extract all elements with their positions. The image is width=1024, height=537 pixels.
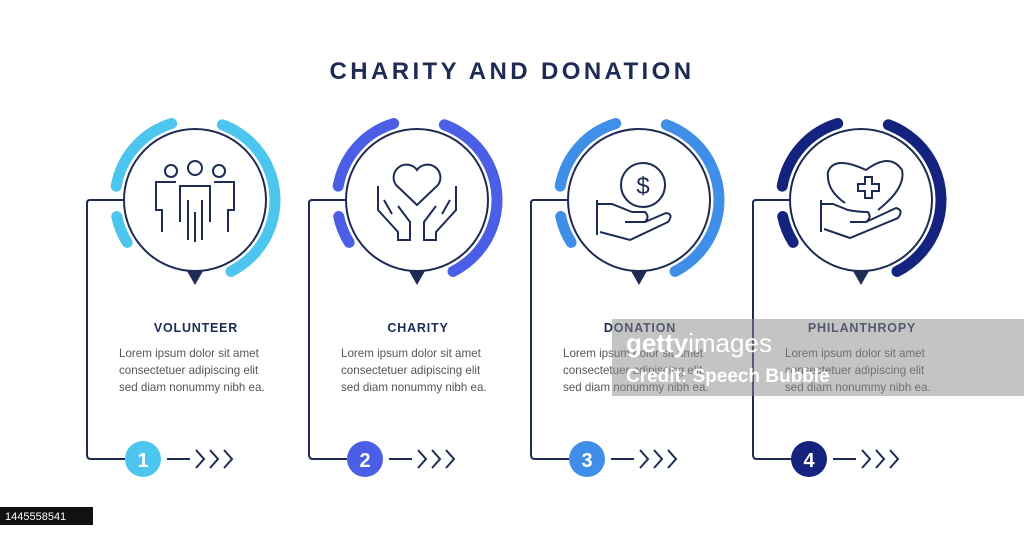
panel: donation: [529, 90, 749, 477]
panel: philanthropy: [751, 90, 971, 477]
heading: CHARITY: [387, 321, 449, 335]
icon circle: [124, 129, 266, 271]
arcs: [751, 90, 971, 310]
number badge 2: 2: [359, 450, 371, 472]
icon circle: [568, 129, 710, 271]
connector line: [753, 200, 791, 459]
connector line: [87, 200, 125, 459]
body text: consectetuer adipiscing elit: [563, 364, 703, 377]
body text: sed diam nonummy nibh ea.: [785, 381, 931, 394]
body text: Lorem ipsum dolor sit amet: [119, 347, 260, 360]
arcs: [85, 90, 305, 310]
body text: sed diam nonummy nibh ea.: [563, 381, 709, 394]
number badge 3: 3: [581, 450, 593, 472]
body text: consectetuer adipiscing elit: [119, 364, 259, 377]
image id label: [0, 507, 93, 525]
icon: hand coin: [597, 163, 671, 240]
icon: hand coin: $: [636, 173, 650, 200]
body text: consectetuer adipiscing elit: [785, 364, 925, 377]
body text: [119, 347, 265, 394]
arcs: [529, 90, 749, 310]
heading: VOLUNTEER: [154, 321, 238, 335]
body text: Lorem ipsum dolor sit amet: [785, 347, 926, 360]
body text: Lorem ipsum dolor sit amet: [563, 347, 704, 360]
connector line: [309, 200, 347, 459]
watermark band: Credit: Speech Bubble: [626, 366, 830, 387]
number badge 4: [791, 441, 827, 477]
panel: volunteer: [85, 90, 305, 477]
number badge 1: 1: [137, 450, 149, 472]
arrow: [167, 450, 232, 468]
body text: sed diam nonummy nibh ea.: [119, 381, 265, 394]
body text: [341, 347, 487, 394]
watermark band: gettyimages: [626, 328, 772, 358]
image id label: 1445558541: [5, 511, 66, 523]
title: CHARITY AND DONATION: [330, 58, 694, 85]
heading: PHILANTHROPY: [808, 321, 916, 335]
body text: sed diam nonummy nibh ea.: [341, 381, 487, 394]
icon: hand heart cross: [821, 161, 902, 238]
heading: DONATION: [604, 321, 676, 335]
icon circle: [790, 129, 932, 271]
number badge 2: [347, 441, 383, 477]
body text: [785, 347, 931, 394]
arrow: [611, 450, 676, 468]
number badge 3: [569, 441, 605, 477]
icon circle: [346, 129, 488, 271]
number badge 1: [125, 441, 161, 477]
arrow: [833, 450, 898, 468]
panel: charity: [307, 90, 527, 477]
connector line: [531, 200, 569, 459]
number badge 4: 4: [803, 450, 815, 472]
icon: people: [156, 161, 234, 242]
body text: Lorem ipsum dolor sit amet: [341, 347, 482, 360]
body text: consectetuer adipiscing elit: [341, 364, 481, 377]
arrow: [389, 450, 454, 468]
icon: hands heart: [378, 165, 456, 240]
arcs: [307, 90, 527, 310]
body text: [563, 347, 709, 394]
watermark band: [612, 319, 1024, 396]
